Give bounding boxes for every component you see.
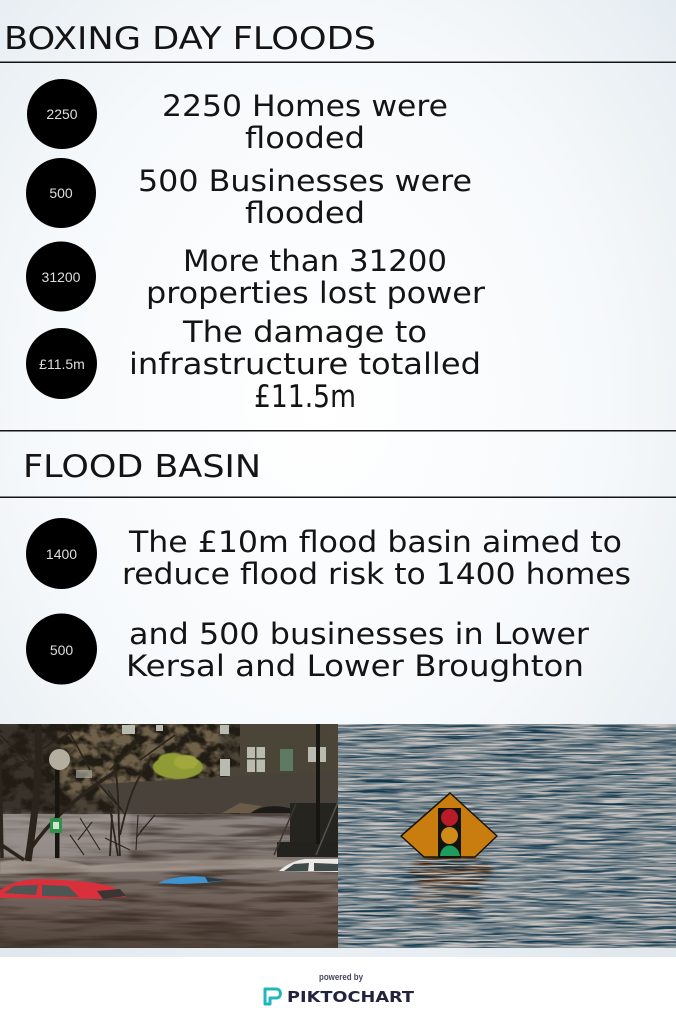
badge: £11.5m	[26, 328, 97, 399]
stat: infrastructure damage	[26, 315, 481, 415]
photo: submerged traffic sign	[338, 724, 676, 948]
text: businesses in Lower Kersal: and 500 businesses in Lower	[129, 617, 589, 651]
stat: 500 businesses	[26, 158, 472, 230]
flood water	[0, 814, 338, 948]
stat: flood basin businesses	[26, 614, 589, 684]
steps and railings	[290, 803, 338, 843]
heading: flood basin: FLOOD BASIN	[23, 449, 261, 485]
text: damage to infrastructure	[129, 315, 481, 415]
stat: flood basin homes	[26, 518, 631, 591]
badge: 2250: 2250	[46, 106, 78, 122]
text: properties lost power	[146, 244, 485, 310]
text: damage to infrastructure: The damage to	[182, 315, 427, 349]
building windows	[76, 725, 326, 778]
text: flood basin aim: The £10m flood basin aimed to	[128, 525, 622, 559]
text: businesses in Lower Kersal	[126, 617, 589, 683]
icon: piktochart mark	[265, 989, 280, 1004]
stat: 2250 homes	[27, 79, 448, 155]
text: damage to infrastructure: infrastructure totalled	[129, 347, 481, 381]
text: homes flooded	[162, 89, 448, 155]
text: damage to infrastructure: £11.5m	[254, 379, 356, 415]
text: properties lost power: More than 31200	[183, 244, 447, 278]
text: businesses flooded: flooded	[245, 196, 365, 230]
lamp post	[49, 749, 70, 858]
footer: piktochart logo	[0, 957, 676, 1024]
footer: piktochart logo: PIKTOCHART	[287, 988, 415, 1006]
badge: 31200	[26, 242, 96, 312]
badge: 2250	[27, 79, 97, 149]
stat: 31200 properties	[26, 242, 485, 312]
badge: 500	[26, 158, 96, 228]
text: flood basin aim	[122, 525, 631, 591]
heading: boxing day floods: BOXING DAY FLOODS	[4, 21, 376, 57]
photo: flooded street with cars	[0, 724, 338, 948]
text: businesses flooded	[138, 164, 472, 230]
text: flood basin aim: reduce flood risk to 1400 homes	[122, 557, 631, 591]
text: businesses in Lower Kersal: Kersal and Lower Broughton	[126, 649, 584, 683]
text: businesses flooded: 500 Businesses were	[138, 164, 472, 198]
bridge	[100, 776, 240, 814]
badge: 500: 500	[50, 642, 73, 658]
badge: £11.5m: £11.5m	[39, 356, 85, 372]
footer: piktochart logo: powered by	[319, 972, 363, 982]
text: homes flooded: flooded	[245, 121, 365, 155]
text: properties lost power: properties lost power	[146, 276, 485, 310]
sign reflection	[408, 855, 492, 889]
badge: 500: 500	[49, 185, 73, 201]
badge: 500	[26, 614, 97, 684]
blue car roof	[158, 876, 229, 884]
bare trees	[0, 724, 175, 861]
white car	[279, 859, 338, 872]
badge: 31200: 31200	[42, 269, 81, 285]
badge: 1400	[26, 518, 97, 589]
text: homes flooded: 2250 Homes were	[162, 89, 448, 123]
badge: 1400: 1400	[46, 546, 77, 562]
sign	[401, 793, 497, 858]
green bush	[153, 753, 203, 779]
red car	[0, 879, 126, 899]
